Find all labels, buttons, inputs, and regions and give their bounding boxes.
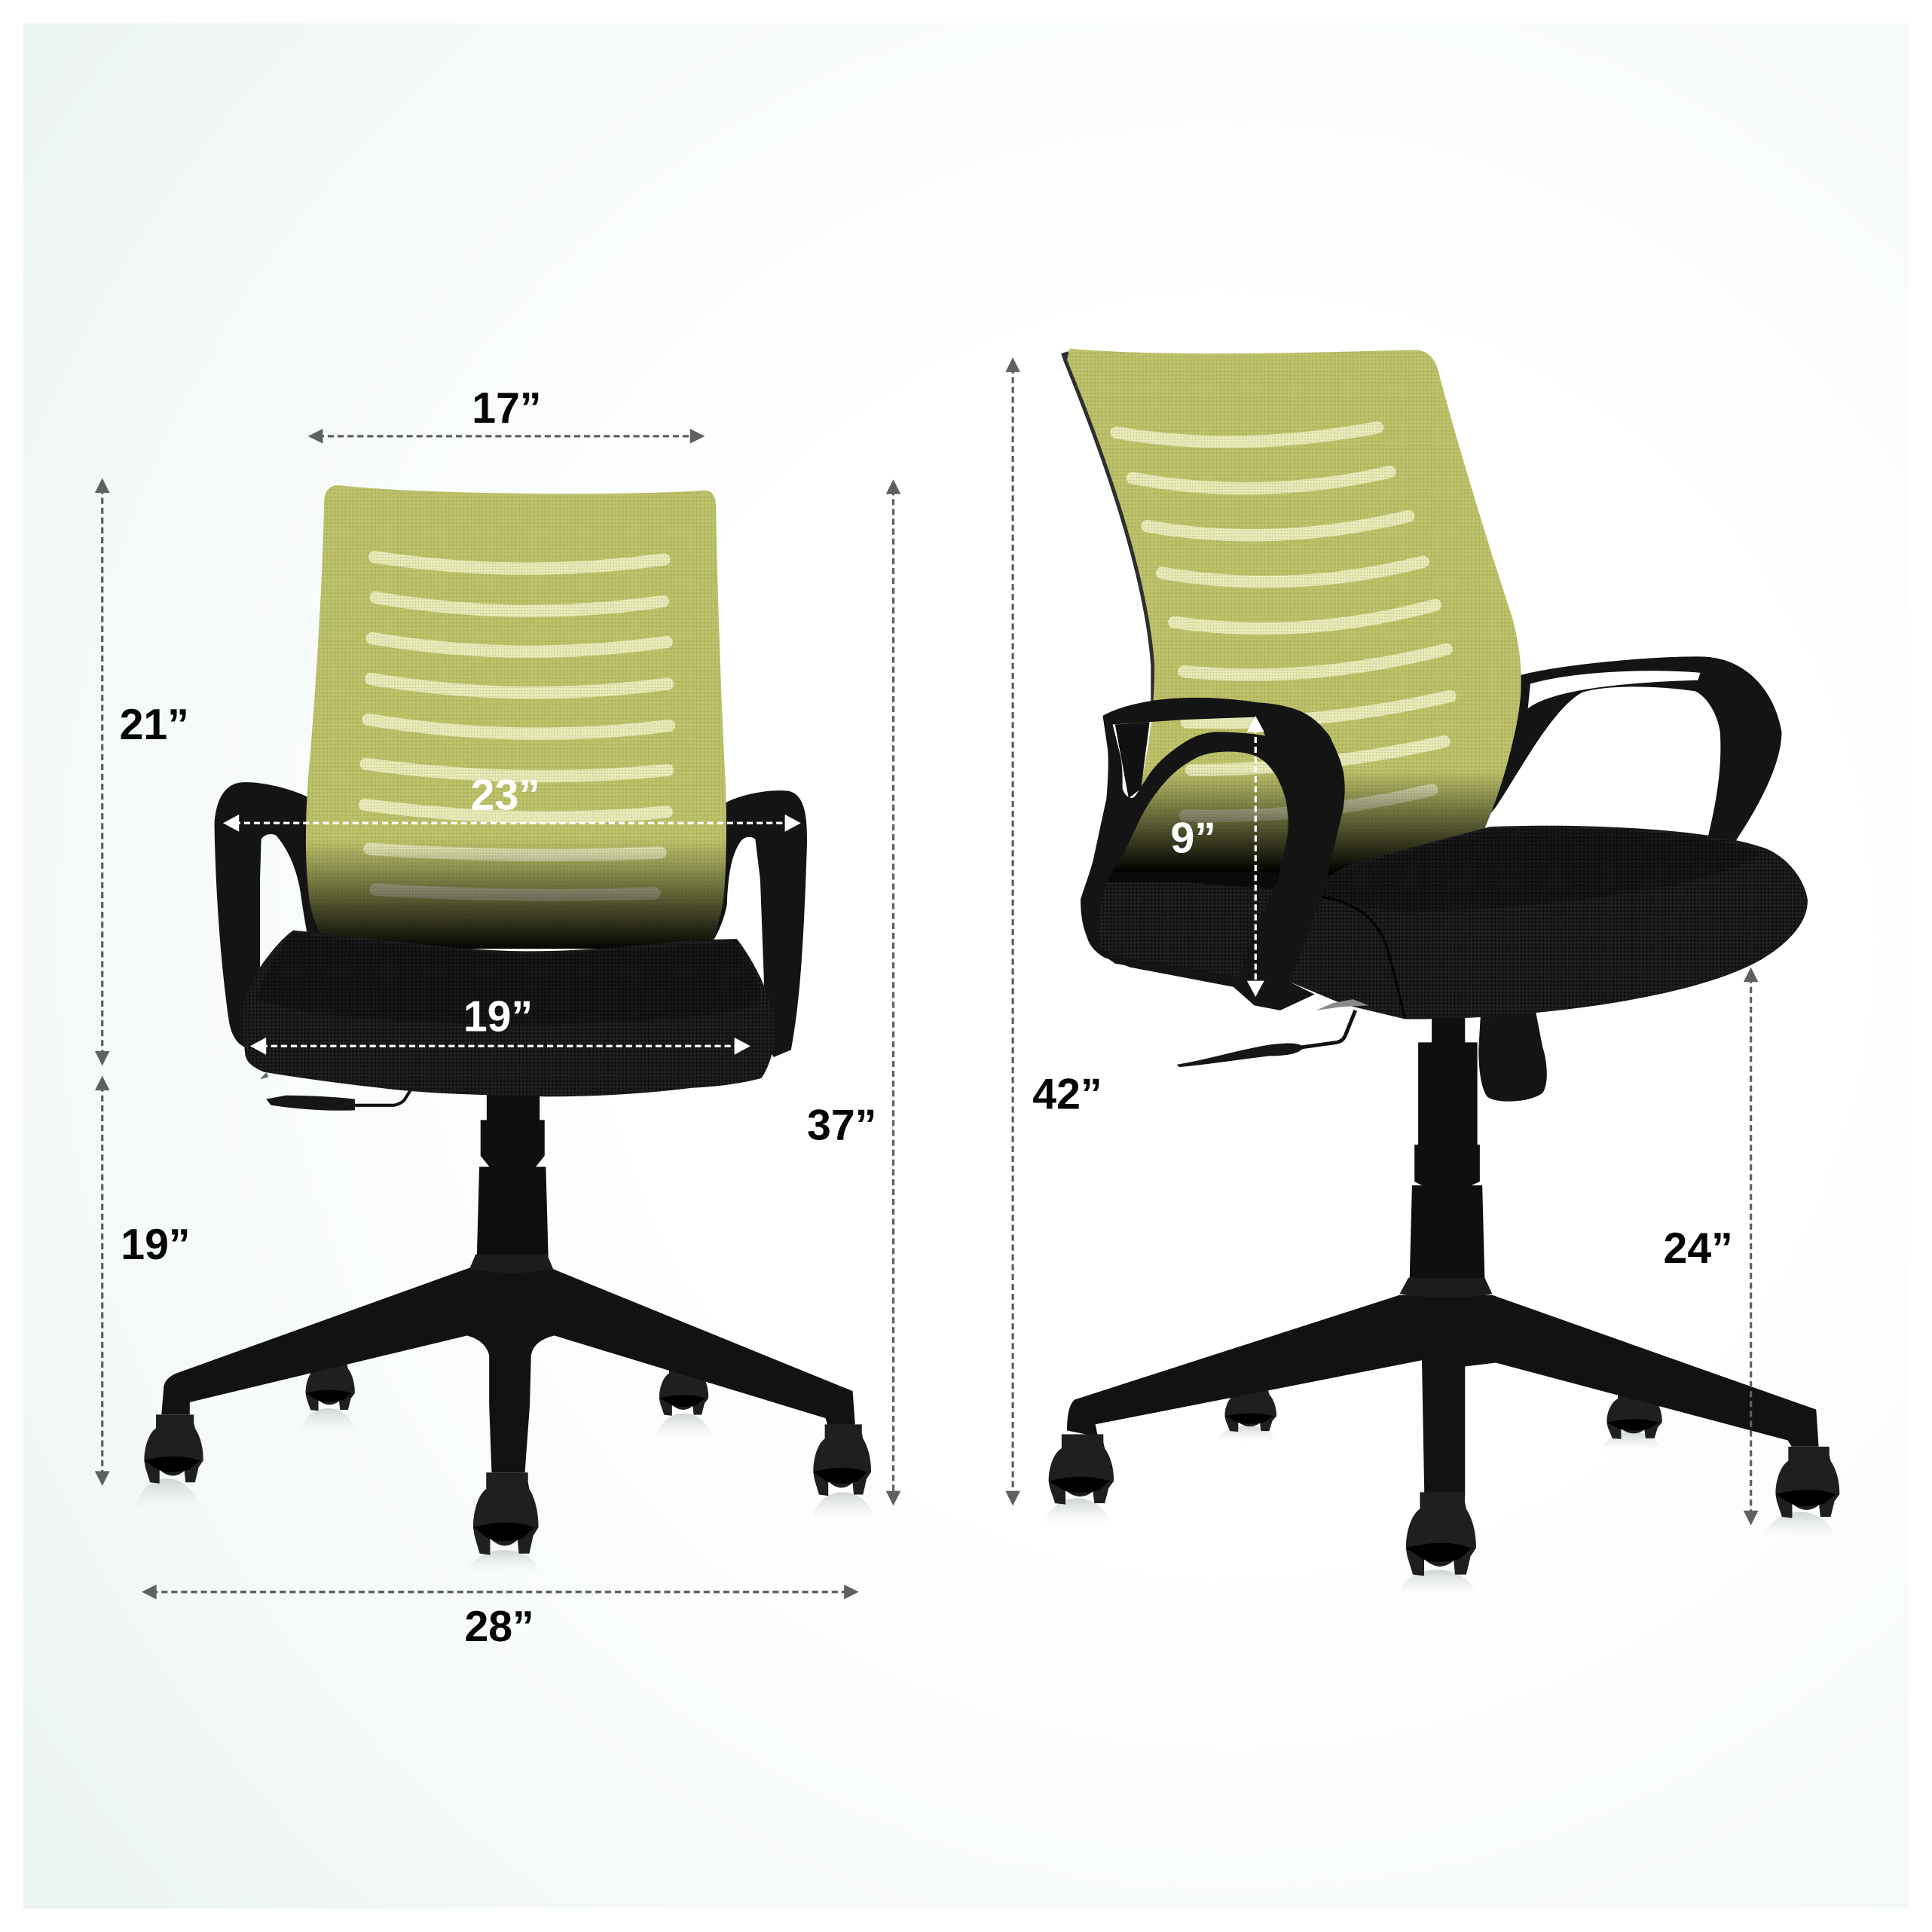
side view chair <box>1044 349 1839 1594</box>
dimension 28 inch base width <box>142 1585 859 1651</box>
bottom fade: side view <box>1067 349 1521 887</box>
mesh slats: side view <box>1116 427 1451 816</box>
mesh back panel: side view <box>1067 349 1521 887</box>
arrow: 19 inch seat height <box>95 1076 110 1486</box>
mesh slats: front view <box>365 557 669 895</box>
under-seat bracket: side view <box>1316 999 1369 1010</box>
height lever: side view <box>1177 1010 1356 1067</box>
rear casters: side view <box>1224 1385 1662 1439</box>
arrow: 23 inch <box>223 815 801 832</box>
arrow: 9 inch <box>1247 716 1264 997</box>
dimension 21 inch back height <box>95 478 189 1065</box>
arrow: 19 inch seat width <box>250 1038 750 1055</box>
far armrest: side view <box>1481 656 1782 840</box>
height lever: front view <box>260 1068 411 1111</box>
cushion seam: side view <box>1321 897 1405 1018</box>
right armrest: front view <box>705 790 807 1057</box>
label: 19 inch seat width: 19” <box>463 993 533 1041</box>
dimension 9 inch armrest height <box>1170 716 1264 997</box>
seat outline: front view <box>243 931 775 1096</box>
arrow: 37 inch <box>886 479 900 1506</box>
label: 42 inch: 42” <box>1032 1071 1102 1119</box>
caster shadows: side view <box>1044 1426 1835 1594</box>
backrest: front view <box>306 485 726 949</box>
label: 28 inch: 28” <box>464 1603 534 1651</box>
shell edge: side view <box>1065 353 1154 708</box>
label: 37 inch: 37” <box>807 1102 876 1150</box>
seat top panel: front view <box>256 933 762 1025</box>
dimension 19 inch seat width <box>250 993 750 1055</box>
dimension 37 inch overall height front <box>807 479 900 1506</box>
tilt knob: side view <box>1478 1003 1547 1102</box>
cushion top panel: side view <box>1321 828 1762 912</box>
front casters: side view <box>1049 1434 1839 1576</box>
five-star base: side view <box>1067 1295 1819 1496</box>
dimension 42 inch overall height side <box>1005 357 1102 1506</box>
front view chair <box>134 485 875 1573</box>
gas lift column: front view <box>469 1093 553 1273</box>
dimension 19 inch seat height <box>95 1076 191 1486</box>
label: 21 inch: 21” <box>120 701 189 749</box>
main cushion: side view <box>1290 826 1808 1019</box>
seat cushion: side view <box>1094 826 1808 1019</box>
label: 17 inch: 17” <box>472 384 542 433</box>
backrest: side view <box>1065 349 1521 887</box>
dimension 23 inch arm width <box>223 771 801 832</box>
bottom fade: front view <box>306 485 726 949</box>
mesh back panel: front view <box>306 485 726 949</box>
dimension 24 inch seat height side <box>1664 968 1758 1525</box>
rear cushion: side view <box>1094 875 1294 991</box>
label: 9 inch: 9” <box>1170 815 1216 863</box>
dimension 17 inch backrest width <box>308 384 705 444</box>
near armrest: side view <box>1081 698 1345 1010</box>
label: 23 inch: 23” <box>471 771 540 819</box>
five-star base: front view <box>161 1268 855 1472</box>
arrow: 42 inch <box>1005 357 1020 1506</box>
arrow: 21 inch <box>95 478 110 1065</box>
gas lift column: side view <box>1400 1007 1492 1298</box>
left armrest: front view <box>215 782 323 1050</box>
arrow: 24 inch <box>1744 968 1758 1525</box>
seat cushion: front view <box>243 931 775 1096</box>
front casters: front view <box>144 1414 871 1555</box>
inner shell shadow: side view <box>1115 722 1150 799</box>
label: 19 inch seat height: 19” <box>121 1221 191 1269</box>
rear casters: front view <box>306 1358 708 1416</box>
caster shadows: front view <box>134 1408 875 1573</box>
rear band: side view <box>1102 873 1286 890</box>
arrow: 17 inch <box>308 429 705 444</box>
label: 24 inch: 24” <box>1664 1224 1733 1273</box>
arrow: 28 inch <box>142 1585 859 1599</box>
